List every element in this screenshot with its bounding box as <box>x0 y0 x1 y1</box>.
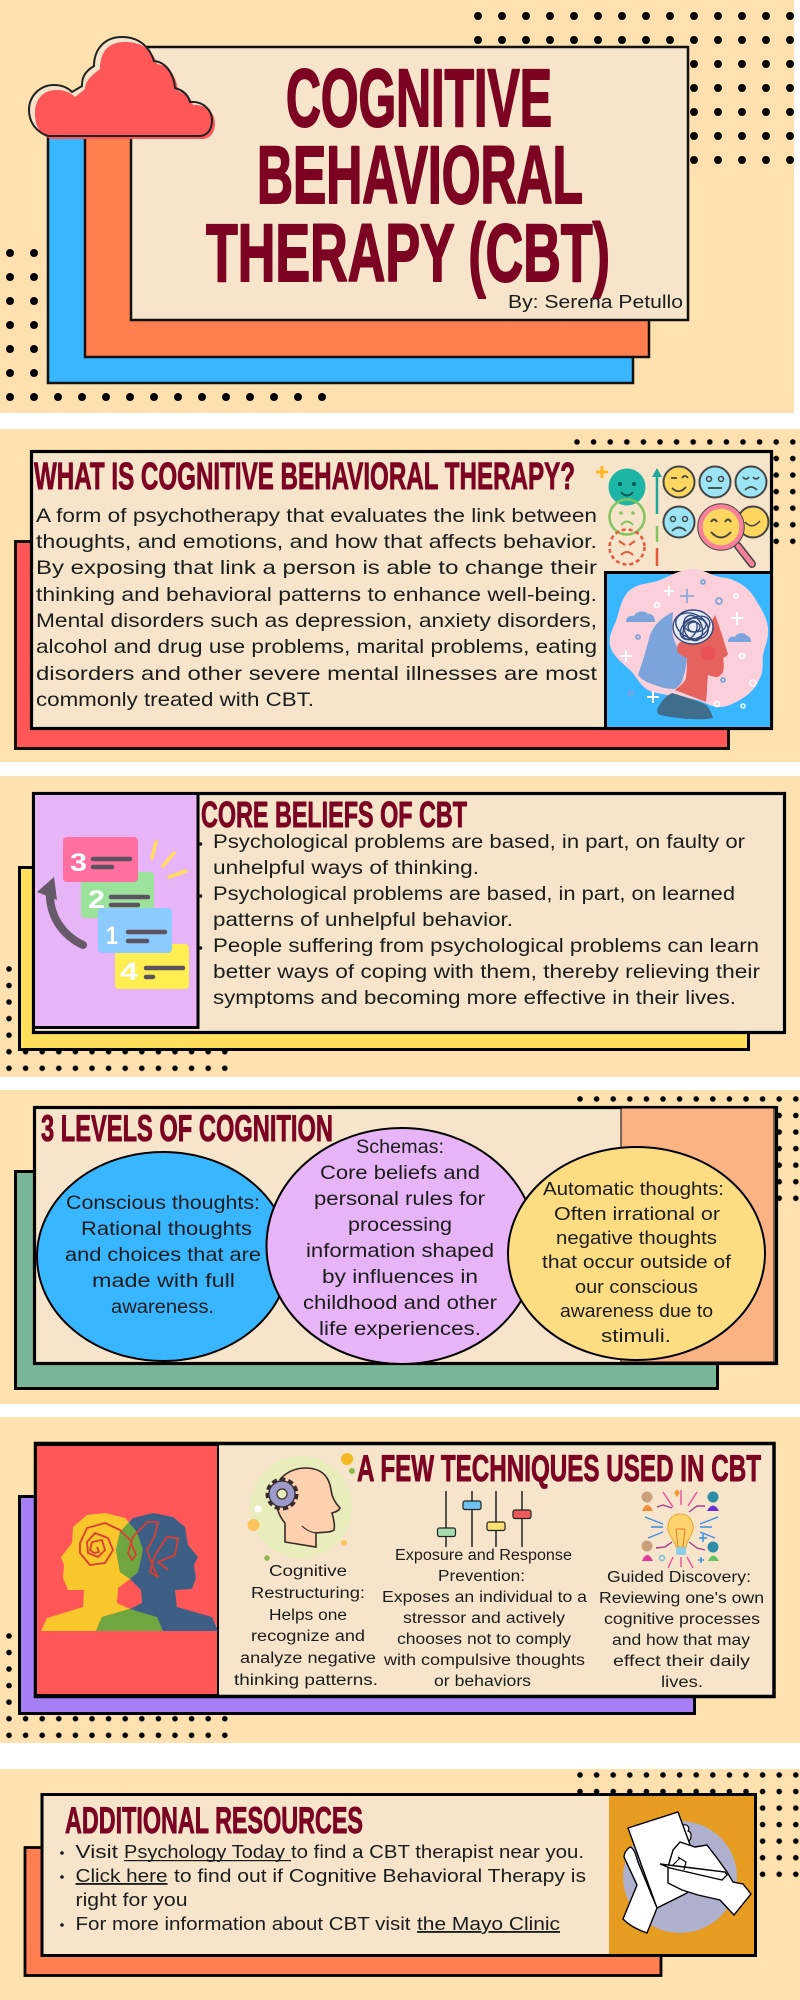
circle: automatic thoughts: negative thoughts <box>556 1227 717 1248</box>
circle: automatic thoughts <box>508 1147 765 1360</box>
circle: schemas: childhood and other <box>303 1292 498 1314</box>
bullet list: core beliefs <box>199 831 761 1009</box>
salmon accent panel <box>621 1108 774 1362</box>
paragraph: definition of CBT: alcohol and drug use problems, marital problems, eating <box>36 636 597 658</box>
dot pattern <box>1 961 233 1077</box>
blue backing panel <box>48 133 633 383</box>
bullet list: resources: Click here <box>76 1865 168 1886</box>
orange backing panel <box>85 78 649 357</box>
bullet list: resources: Psychology Today <box>124 1841 286 1862</box>
heading: levels of cognition: 3 LEVELS OF COGNITION <box>41 1108 333 1149</box>
circle: automatic thoughts: stimuli. <box>601 1325 671 1346</box>
title: COGNITIVE <box>286 53 552 144</box>
bullet list: core beliefs: better ways of coping with them, thereby relieving their <box>213 961 761 983</box>
bullet list: core beliefs: Psychological problems are based, in part, on faulty or <box>213 831 746 853</box>
red backing panel <box>16 542 728 748</box>
circle: automatic thoughts: Automatic thoughts: <box>543 1178 724 1199</box>
paragraph: definition of CBT: commonly treated with CBT. <box>36 689 314 711</box>
text: cognitive restructuring <box>234 1563 378 1689</box>
circle: automatic thoughts: awareness due to <box>560 1300 713 1321</box>
panel: additional resources <box>42 1794 756 1956</box>
title <box>206 53 610 299</box>
paragraph: definition of CBT: thinking and behavioral patterns to enhance well-being. <box>36 584 597 606</box>
circle: schemas: life experiences. <box>319 1318 481 1340</box>
circle: schemas: processing <box>348 1214 452 1236</box>
text: cognitive restructuring: analyze negative <box>240 1650 376 1667</box>
image panel: numbered cards: 4 <box>120 958 138 986</box>
image panel: numbered cards: 3 <box>70 849 87 877</box>
circle: schemas: information shaped <box>306 1240 494 1262</box>
heading: additional resources: ADDITIONAL RESOURCES <box>65 1800 363 1841</box>
bullet list: resources: Visit <box>76 1841 118 1862</box>
text: exposure and response prevention: Exposure and Response <box>395 1547 572 1564</box>
text: exposure and response prevention: or behaviors <box>434 1673 531 1690</box>
circle: automatic thoughts: Often irrational or <box>554 1203 720 1224</box>
purple backing panel <box>20 1496 694 1714</box>
bullet list: core beliefs: People suffering from psychological problems can learn <box>213 935 759 957</box>
icon: cloud <box>29 37 215 139</box>
bullet list: resources: to find out if Cognitive Behavioral Therapy is <box>174 1865 586 1886</box>
icon: sliders <box>438 1491 531 1547</box>
text: guided discovery: Reviewing one's own <box>599 1590 764 1607</box>
image panel: hand writing <box>609 1796 754 1954</box>
title panel <box>131 47 688 320</box>
heading: core beliefs: CORE BELIEFS OF CBT <box>201 794 467 835</box>
text: cognitive restructuring: thinking patterns. <box>234 1672 378 1689</box>
circle: conscious thoughts: and choices that are <box>65 1244 261 1266</box>
text: guided discovery: effect their daily <box>613 1653 750 1670</box>
text: exposure and response prevention <box>382 1547 587 1690</box>
bullet list: resources: the Mayo Clinic <box>417 1913 560 1934</box>
circle: schemas <box>266 1128 536 1364</box>
text: exposure and response prevention: with compulsive thoughts <box>383 1652 585 1669</box>
text: cognitive restructuring: Restructuring: <box>251 1585 365 1602</box>
section 3 background <box>0 776 800 1077</box>
image panel: mental health portrait <box>606 569 772 728</box>
circle: schemas: Core beliefs and <box>320 1162 480 1184</box>
text: exposure and response prevention: chooses not to comply <box>397 1631 571 1648</box>
circle: conscious thoughts: awareness. <box>111 1296 214 1318</box>
dot pattern <box>1 1628 233 1743</box>
dot pattern <box>569 434 800 550</box>
circle: conscious thoughts: made with full <box>92 1270 235 1292</box>
section 2 background <box>0 429 800 762</box>
circle: schemas: Schemas: <box>356 1136 444 1158</box>
bullet list: core beliefs: Psychological problems are based, in part, on learned <box>213 883 735 905</box>
paragraph: definition of CBT: disorders and other severe mental illnesses are most <box>36 663 598 685</box>
section 1 background <box>0 0 794 413</box>
panel: what is CBT <box>32 452 772 728</box>
bullet list: resources: For more information about CBT visit <box>76 1913 410 1934</box>
bullet list: core beliefs: patterns of unhelpful behavior. <box>213 909 513 931</box>
paragraph: definition of CBT: By exposing that link a person is able to change their <box>36 557 598 579</box>
section 5 background <box>0 1417 800 1743</box>
paragraph: definition of CBT: A form of psychotherapy that evaluates the link between <box>36 505 597 527</box>
paragraph: definition of CBT: Mental disorders such as depression, anxiety disorders, <box>36 610 597 632</box>
panel: core beliefs <box>34 794 784 1032</box>
bullet list: resources: to find a CBT therapist near you. <box>291 1841 584 1862</box>
text: exposure and response prevention: Exposes an individual to a <box>382 1589 587 1606</box>
circle: schemas: personal rules for <box>314 1188 486 1210</box>
paragraph: definition of CBT: thoughts, and emotions, and how that affects behavior. <box>36 531 597 553</box>
dot pattern top right <box>466 4 800 172</box>
text: guided discovery: cognitive processes <box>604 1611 760 1628</box>
green backing panel <box>16 1172 718 1388</box>
text: guided discovery <box>599 1569 764 1691</box>
icon: light bulb and people <box>642 1489 719 1568</box>
panel: techniques <box>36 1444 774 1696</box>
section 6 background <box>0 1769 800 2000</box>
circle: conscious thoughts: Rational thoughts <box>81 1218 252 1240</box>
dot pattern <box>572 1091 800 1207</box>
circle: conscious thoughts: Conscious thoughts: <box>66 1192 260 1214</box>
text: cognitive restructuring: Helps one <box>269 1607 347 1624</box>
orange backing panel <box>25 1848 661 1976</box>
bullet list: resources: right for you <box>76 1889 188 1910</box>
text: guided discovery: and how that may <box>612 1632 750 1649</box>
section 4 background <box>0 1090 800 1404</box>
image panel: numbered cards: 2 <box>88 886 105 914</box>
circle: automatic thoughts: that occur outside of <box>542 1251 732 1272</box>
image panel: two overlapping heads <box>36 1445 218 1695</box>
panel: levels of cognition <box>34 1108 776 1364</box>
text: guided discovery: lives. <box>661 1674 703 1691</box>
icon: head with gear <box>248 1453 355 1561</box>
paragraph: definition of CBT <box>36 505 598 711</box>
circle: automatic thoughts: our conscious <box>575 1276 698 1297</box>
text: cognitive restructuring: Cognitive <box>269 1563 347 1580</box>
bullet list: core beliefs: symptoms and becoming more effective in their lives. <box>213 987 736 1009</box>
icon: mood faces <box>596 466 768 566</box>
text: guided discovery: Guided Discovery: <box>607 1569 751 1586</box>
circle: conscious thoughts <box>37 1152 289 1361</box>
bullet list: resources <box>60 1841 586 1934</box>
title: BEHAVIORAL <box>257 130 583 221</box>
bullet list: core beliefs: unhelpful ways of thinking. <box>213 857 479 879</box>
yellow backing panel <box>20 868 748 1050</box>
text: exposure and response prevention: stressor and actively <box>403 1610 565 1627</box>
author byline: By: Serena Petullo <box>508 292 683 312</box>
dot pattern bottom left <box>0 241 334 409</box>
image panel: numbered cards: 1 <box>106 922 118 950</box>
text: exposure and response prevention: Prevention: <box>438 1568 525 1585</box>
text: cognitive restructuring: recognize and <box>251 1628 365 1645</box>
circle: schemas: by influences in <box>322 1266 478 1288</box>
dot pattern <box>572 1767 800 1883</box>
image panel: numbered cards <box>34 794 198 1028</box>
